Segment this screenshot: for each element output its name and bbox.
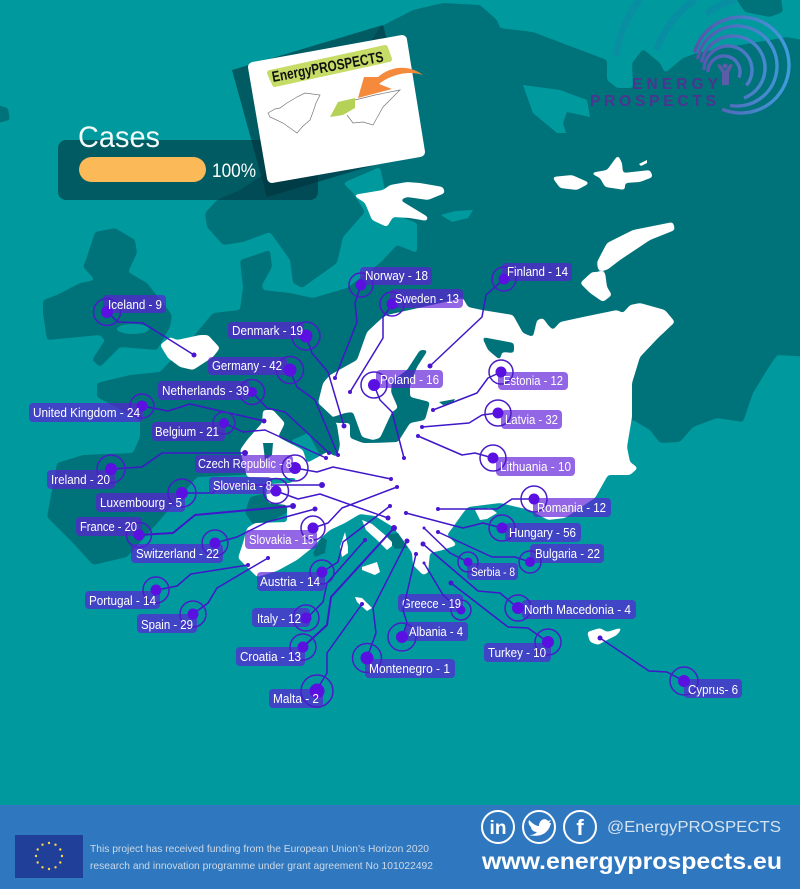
country: North Macedonia: [420, 542, 636, 621]
country: Luxembourg: Luxembourg - 5: [100, 495, 182, 510]
country: Ireland: Ireland - 20: [51, 472, 110, 487]
country: Denmark: [228, 322, 346, 428]
country: Bulgaria: [436, 530, 604, 573]
country: Albania: Albania - 4: [409, 624, 463, 639]
country: Romania: Romania - 12: [537, 500, 606, 515]
country: Germany: [208, 356, 340, 457]
country: Slovakia: Slovakia - 15: [249, 532, 314, 547]
card label: EnergyPROSPECTS: [271, 49, 385, 86]
country: Croatia: Croatia - 13: [240, 649, 301, 664]
country: Sweden: Sweden - 13: [395, 291, 459, 306]
country: Turkey: Turkey - 10: [488, 645, 546, 660]
country: Iceland: Iceland - 9: [108, 297, 162, 312]
country: Bulgaria: Bulgaria - 22: [535, 546, 600, 561]
country: Austria: Austria - 14: [260, 574, 320, 589]
country: Slovakia: [245, 485, 399, 549]
country: Finland: [428, 263, 572, 368]
country: Slovenia: [209, 477, 390, 520]
country: Belgium: Belgium - 21: [155, 424, 219, 439]
website: www.energyprospects.eu: [481, 848, 782, 874]
social handle: @EnergyPROSPECTS: [607, 819, 781, 836]
country: Czech Republic: Czech Republic - 8: [198, 456, 292, 471]
country: Denmark: Denmark - 19: [232, 323, 303, 338]
country: Netherlands: Netherlands - 39: [162, 383, 249, 398]
country: Portugal: Portugal - 14: [89, 593, 156, 608]
country: Norway: [333, 267, 432, 380]
country: Croatia: [236, 525, 397, 666]
funding statement: [90, 843, 433, 872]
funding statement: research and innovation programme under grant agreement No 101022492: [90, 860, 433, 872]
country: Lithuania: Lithuania - 10: [500, 459, 571, 474]
country: Norway: Norway - 18: [365, 268, 428, 283]
Europe highlight: [330, 98, 355, 117]
country: North Macedonia: North Macedonia - 4: [524, 602, 631, 617]
icon: Facebook: [564, 811, 596, 843]
country: Serbia: Serbia - 8: [471, 567, 515, 579]
country: Sweden: [348, 289, 463, 394]
country: United Kingdom: United Kingdom - 24: [33, 405, 140, 420]
country: Estonia: Estonia - 12: [503, 373, 563, 388]
icon: Twitter: [523, 811, 555, 843]
country: Albania: [388, 552, 468, 651]
country: Romania: [436, 486, 611, 517]
icon: Facebook: f: [576, 815, 584, 840]
country: Montenegro: Montenegro - 1: [369, 661, 450, 676]
country: Poland: [361, 370, 443, 460]
logo: EnergyProspects: PROSPECTS: [590, 93, 716, 110]
funding statement: This project has received funding from the European Union’s Horizon 2020: [90, 843, 429, 855]
country: Portugal: [85, 563, 250, 609]
country: Switzerland: Switzerland - 22: [136, 546, 219, 561]
country: Austria: [257, 504, 392, 591]
country: Spain: Spain - 29: [141, 617, 193, 632]
country: United Kingdom: [29, 394, 266, 424]
icon: LinkedIn: in: [490, 818, 506, 839]
country: France: France - 20: [80, 519, 137, 534]
country: Poland: Poland - 16: [380, 372, 439, 387]
country: Malta: Malta - 2: [273, 691, 319, 706]
country: Iceland: [94, 295, 196, 358]
country: Finland: Finland - 14: [507, 264, 568, 279]
icon: LinkedIn: [482, 811, 514, 843]
country: Italy: Italy - 12: [257, 611, 301, 626]
country: Italy: [252, 538, 367, 631]
country: France: [76, 503, 296, 548]
country: Serbia: [422, 526, 518, 580]
country: Czech Republic: [195, 455, 393, 481]
map of Europe: [0, 0, 800, 645]
country: Turkey: [448, 580, 561, 662]
country: Lithuania: [416, 434, 575, 476]
logo: EnergyProspects: ENERGY: [632, 76, 719, 93]
footer: [0, 805, 800, 889]
country: Ireland: [47, 450, 248, 489]
country: Germany: Germany - 42: [212, 358, 282, 373]
country: Switzerland: [131, 506, 318, 563]
world outline: [268, 90, 400, 133]
country: Slovenia: Slovenia - 8: [213, 478, 272, 493]
country: Hungary: Hungary - 56: [509, 525, 576, 540]
country: Hungary: [404, 511, 581, 542]
country: Latvia: Latvia - 32: [505, 412, 558, 427]
progress bar: [79, 157, 206, 182]
logo: EnergyProspects: [590, 0, 789, 113]
country: Cyprus: Cyprus- 6: [688, 682, 738, 697]
card: world map locator: [232, 25, 423, 197]
country: Spain: [137, 556, 270, 633]
country: Malta: [269, 602, 364, 708]
country: Netherlands: [158, 380, 331, 455]
country: Montenegro: [352, 538, 455, 678]
country: Greece: Greece - 19: [402, 596, 461, 611]
country: Latvia: [420, 400, 562, 429]
progress value: 100%: [212, 161, 256, 182]
panel: cases progress: [58, 121, 318, 200]
heading: Cases: Cases: [78, 121, 160, 154]
arrow: [358, 68, 423, 98]
country: Estonia: [431, 360, 568, 412]
icon: EU flag: [15, 835, 83, 878]
country: Belgium: [152, 412, 328, 460]
country: Greece: [398, 562, 471, 620]
country: Cyprus: [598, 636, 742, 698]
country: Luxembourg: [96, 479, 325, 512]
